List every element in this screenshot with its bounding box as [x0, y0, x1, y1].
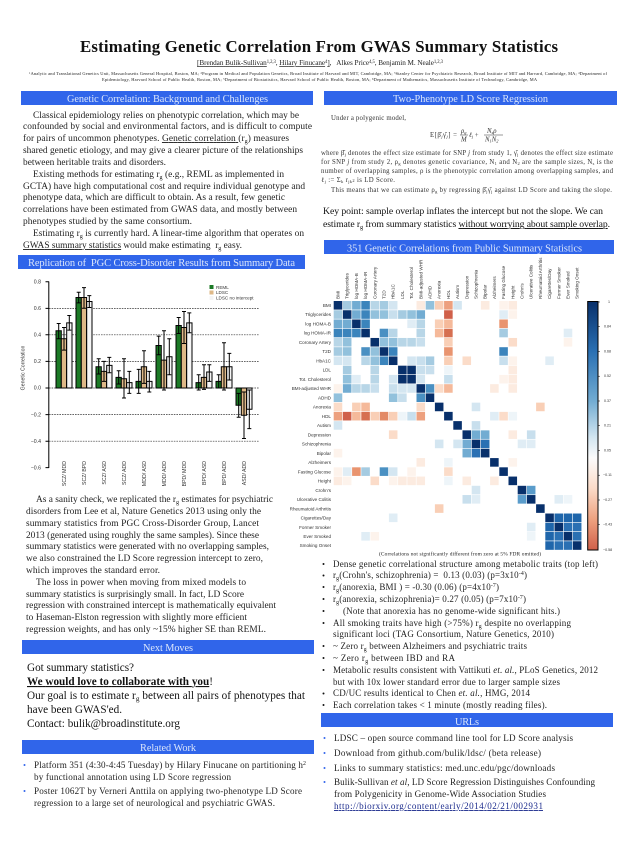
colorbar legend: 0.37	[604, 399, 611, 403]
text block: definitions: by regressing β̂	[438, 187, 488, 194]
text block: sanity check: The loss in power when moving from mixed models to	[36, 577, 246, 588]
text block: background: GCTA) have high computational cost and require individual genotype and	[23, 181, 305, 192]
text block: collaboration call: We would love to collaborate with you!	[27, 676, 213, 688]
text block: sanity check: to Haseman-Elston regression with slightly more efficient	[26, 612, 247, 623]
list: related work: by functional annotation using LD Score regression	[34, 772, 231, 782]
list: findings: -7	[491, 583, 496, 589]
panel: 351 genetic correlations	[290, 240, 614, 710]
text block: collaboration call: between all pairs of phenotypes that	[140, 690, 306, 702]
text block: definitions: j	[516, 152, 518, 157]
text block: definitions: j	[344, 152, 346, 157]
text block: definitions: j from study 1, γ̂	[468, 150, 517, 157]
text block: definitions: j	[324, 179, 326, 184]
text block: background: for pairs of uncommon phenotypes. Genetic correlation (r	[23, 134, 245, 144]
colorbar legend: −0.43	[603, 523, 612, 527]
x axis labels: SCZ/ ADD	[122, 461, 128, 485]
authors: ]	[327, 59, 330, 67]
equation: E[β̂	[430, 132, 441, 139]
list: findings: (anorexia, schizophrenia)= 0.27 (0.05) (p=7x10	[339, 594, 518, 604]
list: findings: r	[333, 594, 336, 604]
text block: background: g	[80, 234, 83, 240]
list: findings: g	[336, 576, 339, 582]
text block: background: Classical epidemiology relies on phenotypic correlation, which may be	[33, 111, 299, 121]
text block: collaboration call	[27, 662, 306, 730]
list: findings: g	[364, 647, 367, 653]
equation: M	[460, 136, 467, 144]
text block: definitions: against LD Score and taking the slope.	[493, 187, 612, 194]
authors: [Brendan Bulik-Sullivan	[197, 59, 267, 67]
list: findings: Each correlation takes < 1 minute (mostly reading files).	[333, 700, 547, 710]
colorbar legend: −0.27	[603, 498, 612, 502]
text block: background: phenotypes studied by the same consortium.	[23, 217, 192, 227]
y axis labels: −0.2	[31, 412, 41, 418]
heatmap row labels: Tot. Cholesterol	[299, 377, 331, 382]
text block: background: g	[160, 175, 163, 181]
list: related work: Platform 351 (4:30-4:45 Tuesday) by Hilary Finucane on partitioning h	[34, 760, 303, 770]
text block: collaboration call: have been GWAS'ed.	[27, 704, 122, 716]
text block: background: correlations have been estimated from GWAS data, and mostly between	[23, 204, 297, 215]
heatmap row labels: Coronary Artery	[299, 340, 332, 345]
heading: background and challenges: Genetic Correlation: Background and Challenges	[67, 94, 268, 105]
heading: URLs: URLs	[455, 717, 479, 728]
colorbar legend: 0.68	[604, 350, 611, 354]
text block: definitions: j	[485, 189, 487, 194]
x axis labels: SCZ/ ASD	[102, 461, 108, 485]
text block: sanity check: we also constrained the LD Score regression intercept to zero,	[26, 554, 263, 564]
heading: 351 correlations: 351 Genetic Correlations from Public Summary Statistics	[347, 244, 582, 254]
heatmap row labels: Triglycerides	[305, 312, 332, 317]
colorbar legend: 0.52	[604, 374, 611, 378]
list: related work: 2	[303, 761, 306, 767]
list: findings: g	[479, 624, 482, 630]
title: Estimating Genetic Correlation From GWAS Summary Statistics	[80, 37, 558, 56]
colorbar legend: 0.21	[604, 424, 611, 428]
colorbar legend: −0.11	[603, 473, 612, 477]
bars and error bars	[56, 288, 252, 439]
affiliations	[29, 71, 608, 83]
text block: definitions: s	[593, 161, 595, 166]
heatmap row labels: Autism	[317, 423, 331, 428]
list: findings: r	[333, 582, 336, 592]
text block: background: Existing methods for estimating r	[33, 170, 160, 180]
text block: collaboration call: Got summary statistics?	[27, 662, 134, 674]
list: URLs: Links to summary statistics: med.unc.edu/pgc/downloads	[334, 763, 555, 773]
heatmap column labels: Depression	[464, 275, 469, 299]
heatmap column labels: Anorexia	[437, 280, 442, 299]
text block: sanity check: regression weights, and has only ~15% higher SE than REML.	[26, 625, 266, 635]
bar chart: genetic correlation	[20, 280, 259, 486]
text block: background: is currently hard. A linear-time algorithm that operates on	[83, 229, 304, 239]
heatmap column labels: ADHD	[428, 285, 432, 299]
text block: sanity check: 2013 (generated using roughly the same samples). Since these	[26, 530, 259, 541]
list: related work: Poster 1062T by Verneri Anttila on applying two-phenotype LD Score	[34, 786, 302, 796]
equation: ρ	[461, 128, 464, 135]
text block: sanity check: disorders from Lee et al, Nature Genetics 2013 using only the	[26, 506, 261, 517]
text block: background: g	[245, 139, 248, 145]
equation: s	[492, 130, 494, 135]
legend: REML	[216, 285, 229, 290]
x axis labels: BPD/ ADD	[222, 461, 228, 485]
text block: definitions: 1	[495, 161, 497, 166]
text block: sanity check: estimates for psychiatric	[179, 494, 273, 505]
list: URLs: LDSC – open source command line tool for LD Score analysis	[334, 733, 573, 743]
x axis labels: MDD/ ADD	[162, 461, 168, 486]
heatmap row labels: Crohn's	[315, 488, 332, 493]
heatmap row labels: LDL	[323, 368, 331, 373]
list: URLs: from Polygenicity in Genome-Wide Association Studies	[334, 789, 546, 799]
text block: definitions: is the	[595, 159, 613, 166]
equation: N	[491, 136, 497, 144]
heatmap column labels: Triglycerides	[345, 272, 350, 299]
text block: definitions: g	[398, 161, 401, 166]
text block: definitions: := Σ	[326, 177, 341, 184]
panel: URLs	[321, 713, 613, 811]
callout: key point: g	[360, 224, 364, 231]
list: findings: g	[365, 659, 368, 665]
equation: j	[446, 134, 449, 139]
equation: 2	[496, 138, 499, 144]
list: findings: g	[336, 588, 339, 594]
heading: URLs	[321, 713, 613, 728]
heatmap row labels: Cigarettes/Day	[301, 516, 332, 520]
callout: key point	[323, 206, 610, 231]
y axis labels: 0.4	[34, 332, 41, 338]
panel: next moves	[22, 640, 314, 730]
panel: background and challenges	[21, 91, 313, 252]
equation: j	[440, 134, 443, 139]
list: findings: )	[496, 582, 499, 592]
text block: definitions: 2	[352, 178, 355, 183]
text block: sanity check: summary statistics were generated with no overlapping samples,	[26, 542, 269, 552]
list: findings: despite no overlapping	[482, 618, 572, 628]
heatmap column labels: HbA1C	[391, 284, 396, 299]
text block: definitions: denotes genetic covariance, N	[401, 159, 494, 166]
heatmap caption: (Correlations not significantly different from zero at 5% FDR omitted)	[379, 550, 541, 558]
text block: background: phenotype data, which are difficult to obtain. As a result, few genetic	[23, 192, 285, 203]
heatmap row labels: ADHD	[318, 395, 332, 400]
panel: two-phenotype LD score regression	[321, 91, 617, 231]
text block: background: (e.g., REML as implemented in	[163, 169, 284, 180]
text block: background: g	[218, 246, 221, 252]
list: findings: (Note that anorexia has no genome-wide significant hits.)	[343, 606, 560, 616]
legend: LDSC no intercept	[216, 296, 254, 300]
authors: Hilary Finucane	[279, 59, 325, 67]
heatmap row labels: BMI-adjusted WHR	[292, 386, 332, 391]
text block: definitions: ℓ	[321, 177, 324, 184]
heatmap column labels: Rheumatoid Arthritis	[538, 257, 543, 299]
list: findings: between Alzheimers and psychiatric traits	[367, 641, 527, 651]
legend: LDSC	[216, 290, 229, 295]
list: URLs: Download from github.com/bulik/ldsc/ (beta release)	[334, 748, 541, 758]
text block: definitions: 2	[517, 161, 520, 166]
x axis labels	[62, 461, 248, 486]
text block: definitions: r	[344, 177, 349, 184]
x axis labels: ASD/ ADD	[242, 461, 248, 485]
x axis labels: MDD/ ASD	[142, 461, 148, 486]
affiliations: Epidemiology, Harvard School of Public Health, Boston, MA;	[102, 77, 222, 82]
affiliations: 5	[223, 77, 225, 81]
heatmap row labels: Height	[318, 479, 332, 484]
heading: next moves: Next Moves	[143, 643, 193, 654]
y axis labels: 0.0	[34, 386, 41, 392]
list: findings: )	[523, 594, 526, 604]
affiliations: Department of Mathematics, Massachusetts Institute of Technology, Cambridge, MA	[374, 77, 538, 83]
equation: ℓ	[469, 132, 472, 139]
callout: key point: Key point: sample overlap inflates the intercept but not the slope. We can	[323, 206, 603, 217]
affiliations: Department of	[580, 71, 608, 76]
heatmap row labels: Bipolar	[317, 451, 331, 456]
list: findings: (anorexia, BMI ) = -0.30 (0.06) (p=4x10	[339, 582, 491, 592]
equation: ] =	[448, 132, 457, 139]
colorbar legend	[588, 300, 612, 552]
colorbar legend: 1	[608, 300, 610, 304]
text block: sanity check: regression with constrained intercept is mathematically equivalent	[26, 601, 276, 611]
text block: definitions: k	[341, 179, 344, 184]
text block: definitions: jk	[347, 179, 353, 184]
list: findings: -7	[518, 595, 523, 601]
list: findings: r	[333, 570, 336, 580]
text block: definitions: denotes the effect size estimate	[519, 150, 613, 157]
authors: , Benjamin M. Neale	[375, 59, 434, 67]
y axis labels: Genetic Correlation	[20, 346, 26, 390]
heatmap column labels: Height	[510, 285, 515, 299]
heatmap column labels: HDL	[446, 289, 451, 299]
affiliations: 4	[578, 71, 580, 75]
text block: sanity check	[26, 494, 276, 635]
x axis labels: BPD/ MDD	[182, 461, 188, 486]
list: findings: Dense genetic correlational structure among metabolic traits (top left)	[333, 559, 598, 569]
text block: definitions: This means that we can estimate ρ	[331, 187, 435, 194]
colorbar legend: −0.58	[603, 548, 612, 552]
heatmap row labels: Anorexia	[313, 405, 331, 410]
text: model intro: Under a polygenic model,	[331, 115, 406, 122]
callout: key point: without worrying about sample overlap.	[458, 219, 610, 230]
y axis labels	[20, 280, 41, 472]
equation: N	[487, 128, 492, 135]
equation: ρ	[492, 128, 497, 135]
heatmap row labels: log HOMA-B	[305, 322, 331, 326]
heatmap column labels: Tot. Cholesterol	[409, 267, 414, 299]
text block: background: GWAS summary statistics would make estimating r	[23, 241, 218, 251]
text block: collaboration call: Our goal is to estimate r	[27, 690, 136, 702]
list: findings	[324, 559, 598, 710]
heatmap row labels: Ever Smoked	[303, 534, 331, 539]
text block: background: Estimating r	[33, 229, 80, 239]
affiliations: Analytic and Translational Genetics Unit, Massachusetts General Hospital, Boston, MA;	[31, 71, 200, 77]
list: URLs: Bulik-Sullivan et al, LD Score Regression Distinguishes Confounding	[334, 777, 595, 787]
heatmap row labels: BMI	[323, 303, 331, 308]
equation	[430, 128, 503, 144]
heatmap column labels: Bipolar	[483, 284, 488, 299]
text block: definitions	[321, 150, 614, 194]
authors: 1,2,3	[434, 60, 444, 65]
text block: sanity check: summary statistics is surprisingly small. In fact, LD Score	[26, 589, 244, 600]
heading: 351 correlations	[324, 240, 614, 254]
heatmap row labels: HbA1C	[316, 358, 332, 363]
heading: two-phenotype	[324, 91, 617, 105]
x axis labels: BPD/ ASD	[202, 461, 208, 485]
equation: γ̂	[442, 132, 448, 139]
list: findings: -4	[519, 571, 524, 577]
text block: definitions: and N	[497, 159, 517, 166]
heatmap column labels: BMI	[336, 291, 340, 299]
affiliations: 6	[372, 77, 374, 81]
list: related work	[24, 760, 306, 808]
heatmap column labels	[336, 257, 580, 299]
heading: two-phenotype: Two-Phenotype LD Score Regression	[393, 94, 548, 105]
heatmap column labels: LDL	[400, 290, 405, 299]
list: findings: g	[336, 600, 339, 606]
heatmap column labels: Former Smoker	[556, 267, 561, 299]
panel: replication of PGC results	[18, 255, 305, 635]
equation: g	[464, 130, 467, 135]
heatmap: correlation matrix	[334, 301, 581, 550]
heatmap row labels: Ulcerative Colitis	[297, 497, 332, 502]
list: findings: )	[524, 570, 527, 580]
text block: collaboration call: Contact: bulik@broadinstitute.org	[27, 718, 180, 730]
list: findings: significant loci (TAG Consortium, Nature Genetics, 2010)	[333, 629, 554, 639]
heatmap row labels	[290, 303, 332, 548]
x axis labels: SCZ/ MDD	[62, 461, 68, 486]
heatmap row labels: Alzheimers	[308, 460, 332, 465]
text block: definitions: j	[490, 189, 492, 194]
heatmap column labels: Ulcerative Colitis	[529, 264, 534, 299]
heatmap column labels: log HOMA-IR	[363, 271, 368, 299]
text block: definitions: number of overlapping samples, ρ is the phenotypic correlation among overlapping samples, and	[321, 168, 614, 175]
list: URLs: http://biorxiv.org/content/early/2014/02/21/002931	[334, 801, 543, 811]
heatmap column labels: BMI-adjusted WHR	[418, 259, 423, 299]
callout: key point: from summary statistics	[363, 219, 459, 230]
authors: 1,2,3	[267, 60, 277, 65]
list: findings: ~ Zero r	[333, 641, 364, 651]
callout: key point: estimate r	[323, 219, 360, 230]
heatmap row labels: Depression	[308, 432, 331, 437]
text block: sanity check: summary statistics from PGC Cross-Disorder Group, Lancet	[26, 518, 259, 529]
equation: +	[473, 132, 479, 139]
y axis labels: 0.6	[34, 306, 41, 312]
y axis labels: 0.8	[34, 280, 41, 286]
heading: next moves	[22, 640, 314, 654]
affiliations: Program in Medical and Population Genetics, Broad Institute of Harvard and MIT, Cambridge, MA;	[202, 71, 394, 77]
heatmap column labels: Cigarettes/Day	[547, 268, 552, 299]
heatmap column labels: Ever Smoked	[566, 271, 570, 299]
heatmap row labels: Rheumatoid Arthritis	[290, 506, 332, 511]
list: findings: between IBD and RA	[369, 653, 456, 663]
list: findings: but with 10x lower standard error due to larger sample sizes	[333, 677, 560, 687]
heatmap row labels: log HOMA-IR	[304, 331, 332, 336]
text block: background: between heritable traits and disorders.	[23, 158, 166, 168]
heading: related work	[22, 740, 314, 754]
authors: ,	[276, 59, 279, 67]
colorbar legend: 0.84	[604, 325, 611, 329]
text block: definitions: denotes the effect size estimate for SNP	[346, 150, 468, 157]
heatmap column labels: T2D	[382, 290, 386, 299]
panel: related work	[22, 740, 314, 808]
text block: background: confounded by social and environmental factors, and is difficult to compute	[23, 121, 312, 132]
list: URLs	[324, 733, 595, 811]
heatmap column labels: Coronary Artery	[372, 266, 377, 299]
list: findings: All smoking traits have high (>75%) r	[333, 618, 479, 628]
affiliations: 1	[29, 71, 31, 75]
colorbar legend: 0.05	[604, 448, 611, 452]
heatmap row labels: Fasting Glucose	[298, 469, 331, 474]
legend	[210, 285, 254, 300]
heading: replication: Replication of PGC Cross-Disorder Results from Summary Data	[28, 258, 295, 269]
affiliations: Stanley Center for Psychiatric Research, Broad Institute of MIT and Harvard, Cambridge, MA;	[396, 71, 578, 77]
heatmap column labels: Alzheimers	[492, 276, 497, 299]
text block: definitions: γ̂	[487, 187, 493, 194]
heatmap column labels: Autism	[455, 285, 460, 299]
heatmap row labels: Smoking Onset	[300, 543, 332, 548]
heading: related work: Related Work	[140, 743, 197, 754]
text block: background: ) measures	[248, 133, 289, 144]
heatmap row labels: Schizophrenia	[302, 442, 331, 447]
y axis labels: 0.2	[34, 359, 41, 365]
text block: collaboration call: g	[136, 695, 140, 703]
heatmap row labels: T2D	[322, 349, 332, 354]
affiliations: 2	[200, 71, 202, 75]
text block: definitions: where β̂	[321, 150, 344, 157]
heatmap column labels: Smoking Onset	[575, 267, 580, 299]
list: findings: CD/UC results identical to Chen et. al., HMG, 2014	[333, 688, 530, 698]
heatmap row labels: Former Smoker	[299, 525, 331, 530]
x axis labels: SCZ/ BPD	[82, 461, 88, 485]
text block: background: shared genetic etiology, and may give a clearer picture of the relationships	[23, 145, 303, 156]
heatmap column labels: Fasting Glucose	[501, 265, 506, 299]
equation: 1	[490, 138, 492, 144]
list: findings: (Crohn's, schizophrenia) = 0.13 (0.03) (p=3x10	[339, 570, 519, 580]
heading: background and challenges	[21, 91, 313, 105]
text block: sanity check: g	[176, 500, 179, 506]
text block: background: easy.	[221, 241, 242, 251]
text block: sanity check: which improves the standard error.	[26, 566, 160, 576]
equation: j	[471, 134, 474, 139]
heatmap row labels: HDL	[322, 414, 331, 419]
text block: background	[23, 111, 312, 252]
list: findings: Metabolic results consistent with Vattikuti et. al., PLoS Genetics, 2012	[333, 665, 598, 675]
y axis labels: −0.6	[31, 466, 41, 472]
text block: definitions: g	[435, 189, 438, 194]
y axis labels: −0.4	[31, 439, 41, 445]
text block: definitions: is LD Score.	[355, 177, 395, 184]
list: related work: regression to a large set of neurological and psychiatric GWAS.	[34, 798, 275, 808]
authors: , Alkes Price	[330, 59, 369, 67]
text block: sanity check: As a sanity check, we replicated the r	[36, 495, 176, 505]
authors: 4,5	[369, 60, 375, 65]
affiliations: Department of Biostatistics, Harvard School of Public Health, Boston, MA;	[225, 77, 372, 83]
affiliations: 3	[394, 71, 396, 75]
heatmap column labels: Crohn's	[520, 283, 524, 299]
heatmap column labels: Schizophrenia	[474, 269, 478, 299]
authors: 4	[325, 60, 328, 65]
text block: definitions: for SNP j from study 2, ρ	[321, 159, 398, 166]
heatmap column labels: log HOMA-B	[354, 273, 359, 299]
equation: N	[485, 136, 490, 144]
list: findings: ~ Zero r	[333, 653, 365, 663]
text block: definitions: are the sample sizes, N	[520, 159, 592, 166]
